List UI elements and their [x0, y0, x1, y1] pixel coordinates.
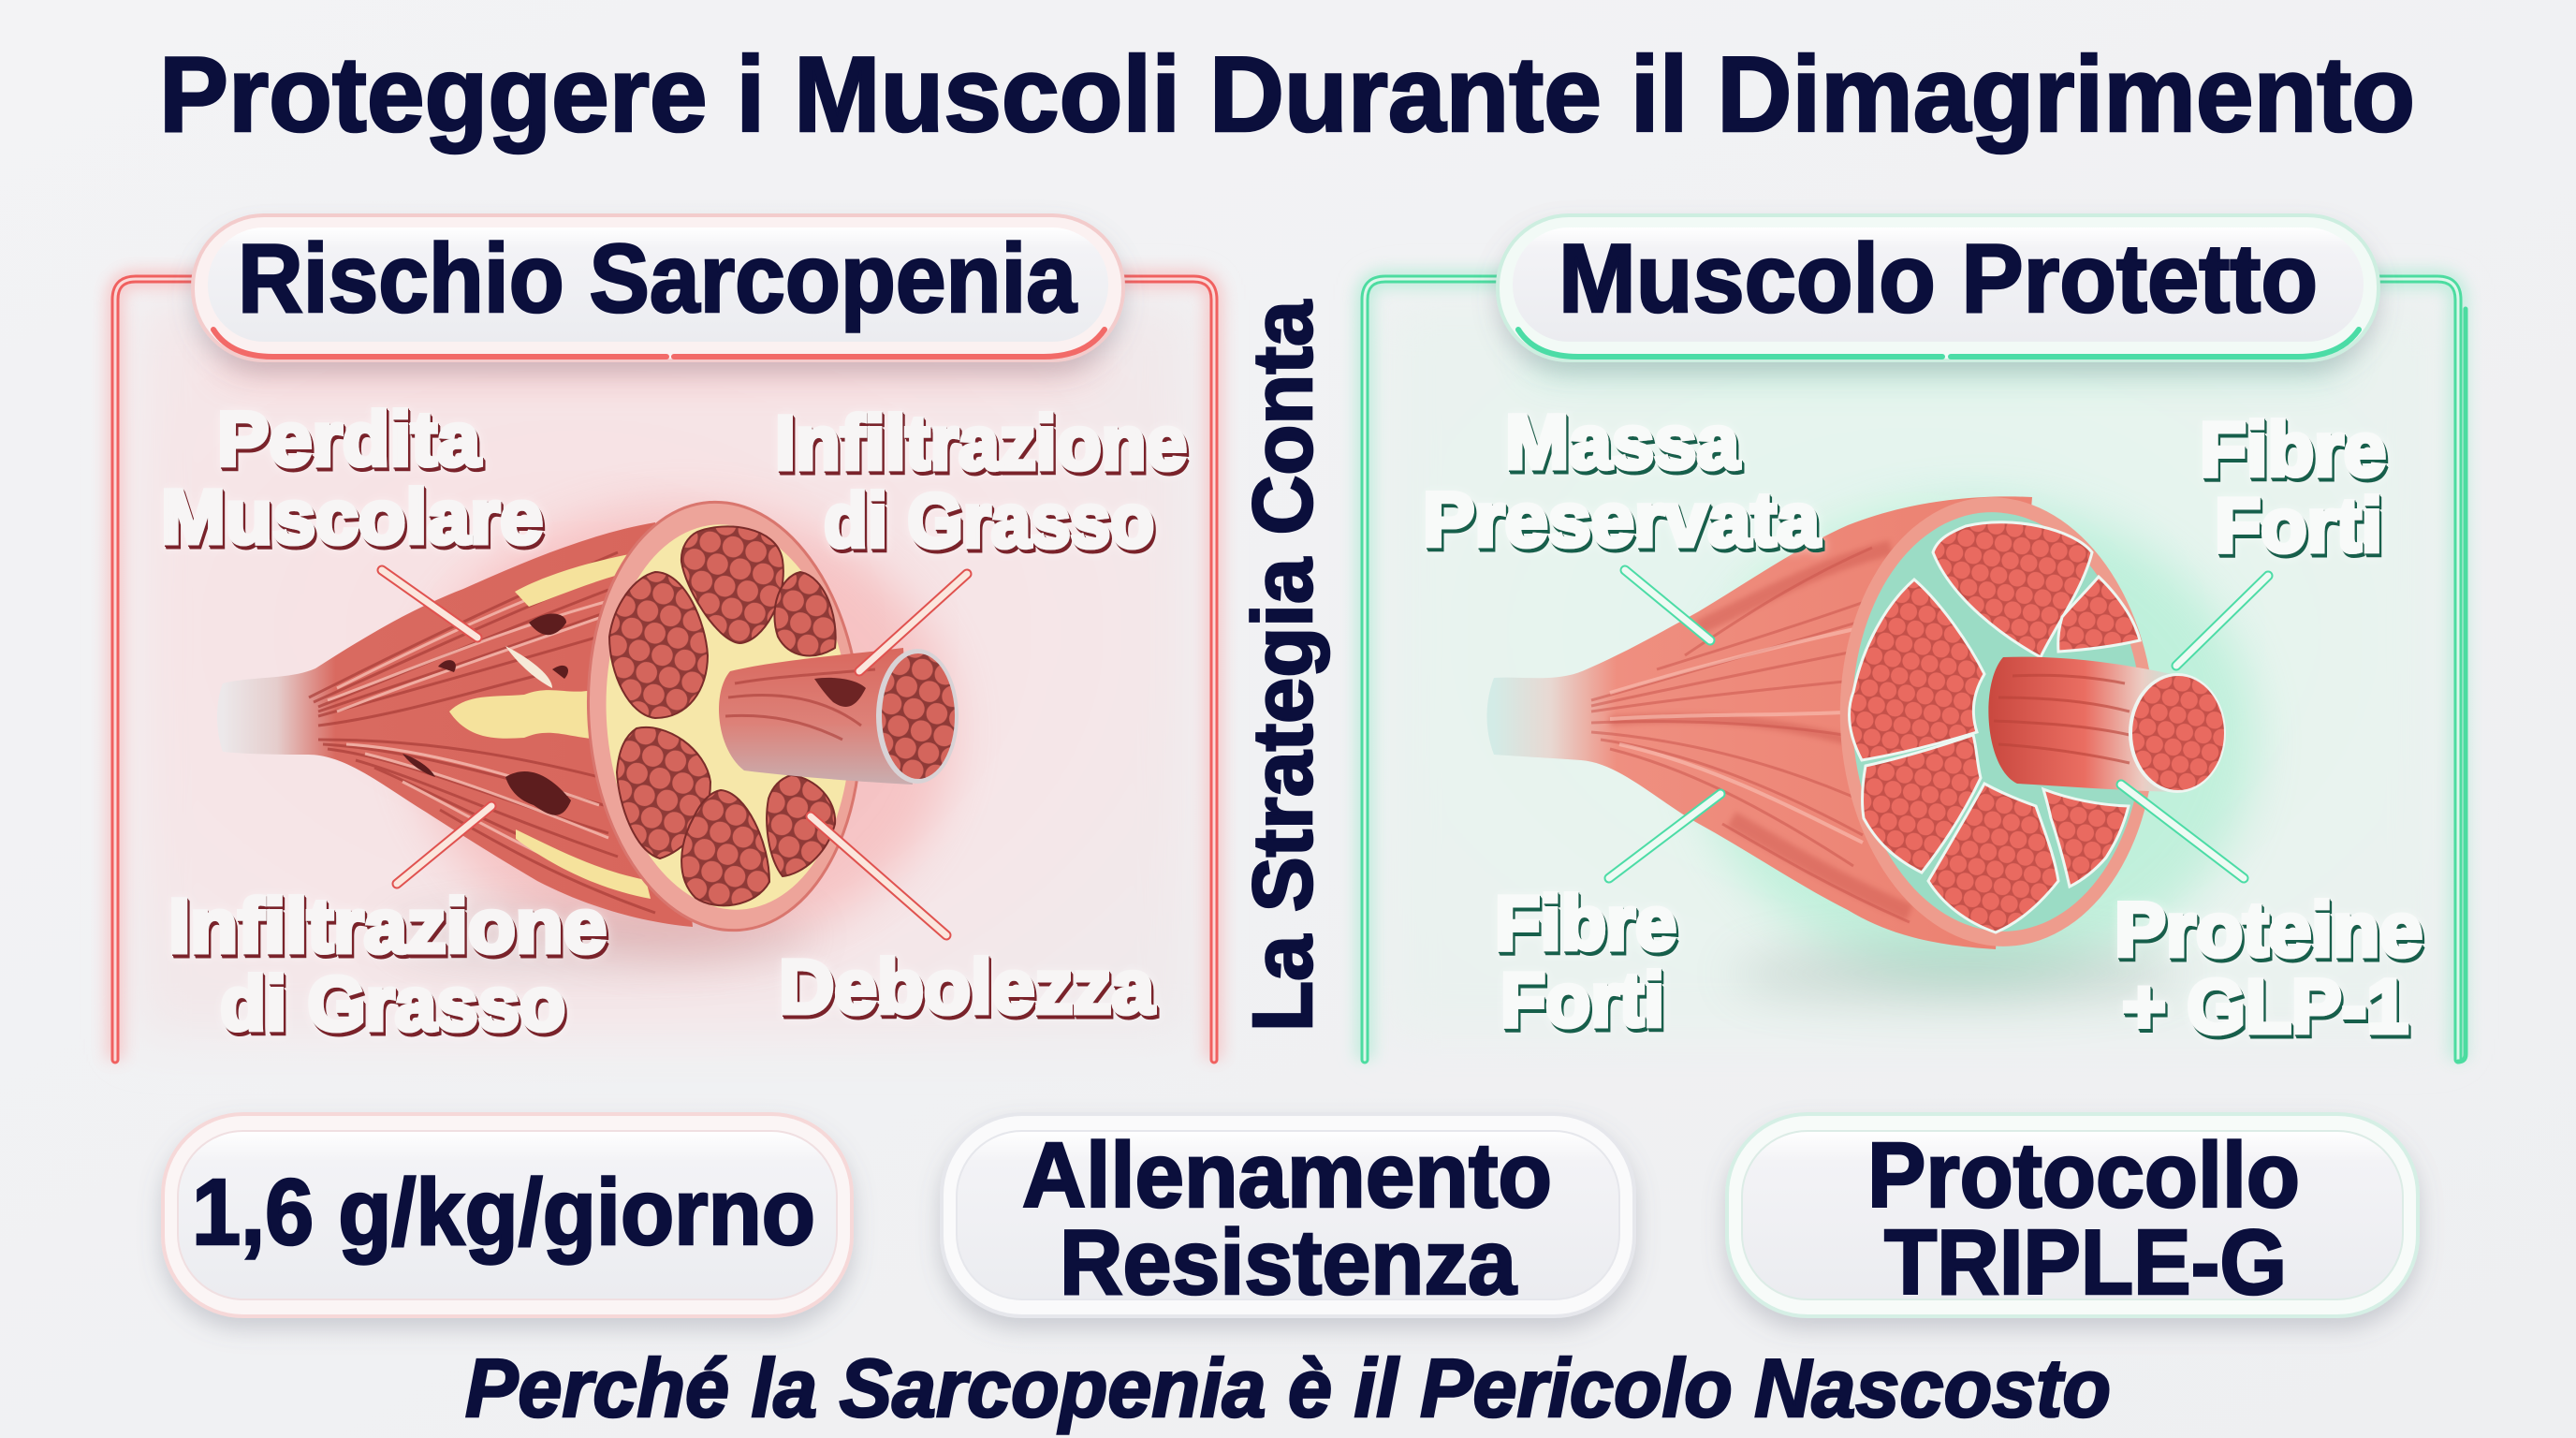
cast shadow [1732, 946, 2181, 1002]
bundle end cells [2132, 676, 2224, 790]
label: fibre forti bottom: Forti [1500, 958, 1664, 1043]
panel tint [1385, 300, 2443, 1039]
header text: Muscolo Protetto [1559, 225, 2318, 333]
muscle body [1486, 496, 2032, 949]
fat layer [593, 516, 863, 918]
frame [1365, 279, 2466, 1062]
pill text: 1,6 g/kg/giorno [192, 1160, 815, 1265]
panel tint [136, 300, 1193, 1039]
muscle glow [412, 506, 955, 955]
pill: protein target [163, 1114, 852, 1316]
fibre highlights [1610, 627, 1863, 843]
bundle end cells [882, 653, 955, 779]
callout lines [1609, 570, 2268, 878]
callout lines [382, 570, 967, 935]
fascicles [1850, 522, 2140, 932]
label: perdita muscolare [161, 397, 543, 560]
panel: rischio sarcopenia [115, 215, 1214, 1060]
muscle illustration: sarcopenia [217, 492, 959, 964]
header pill [193, 215, 1123, 369]
bundle end [876, 649, 959, 784]
label: fibre forti top: Forti [2215, 483, 2382, 568]
label: massa preservata: Massa [1505, 400, 1740, 485]
connective layer [1841, 505, 2154, 939]
fascicles [609, 526, 836, 905]
label: debolezza: Debolezza [779, 945, 1155, 1030]
frame [115, 279, 1214, 1060]
pill text: Allenamento [1022, 1123, 1552, 1226]
pill text: Resistenza [1060, 1211, 1517, 1313]
muscle body [217, 522, 693, 927]
pill text [1867, 1123, 2300, 1313]
bundle fibres [725, 669, 875, 740]
label: proteine glp-1 [2115, 888, 2422, 1049]
fibre highlights [328, 562, 637, 894]
pill: triple-g protocol [1727, 1114, 2418, 1316]
central bundle [1988, 657, 2181, 792]
label: massa preservata: Preservata [1423, 477, 1821, 563]
label: infiltrazione di grasso bottom [168, 884, 607, 1047]
muscle illustration: protected [1486, 490, 2256, 1002]
footer subtitle: Perché la Sarcopenia è il Pericolo Nascosto [465, 1342, 2111, 1434]
muscle fibres [1591, 548, 1910, 922]
label: perdita muscolare: Perdita [217, 397, 481, 482]
cross-section rim [1829, 490, 2166, 954]
pill: resistance training [942, 1114, 1634, 1316]
muscle glow [1694, 501, 2256, 978]
label: massa preservata [1423, 400, 1821, 563]
bundle fibres [1994, 675, 2130, 763]
title: Proteggere i Muscoli Durante il Dimagrimento [159, 36, 2415, 154]
cross-section rim [574, 492, 875, 940]
muscle fibres [309, 552, 655, 913]
pill text [1022, 1123, 1552, 1313]
label: proteine glp-1: Proteine [2115, 888, 2422, 973]
header text: Rischio Sarcopenia [238, 225, 1077, 333]
label: infiltrazione di grasso bottom: Infiltrazione [168, 884, 607, 969]
fat deposits [449, 550, 651, 899]
muscle tears [402, 614, 571, 815]
bundle tear [814, 678, 866, 707]
header pill [1498, 215, 2378, 369]
frame glow [115, 279, 1214, 1060]
label: fibre forti top [2200, 407, 2386, 568]
label: fibre forti top: Fibre [2200, 407, 2386, 492]
label: perdita muscolare: Muscolare [161, 475, 543, 560]
pill text: TRIPLE-G [1884, 1211, 2287, 1313]
frame glow [1365, 279, 2458, 1060]
central bundle [719, 648, 913, 785]
label: infiltrazione di grasso bottom: di Grasso [220, 961, 565, 1047]
muscle darker bands [1610, 548, 1910, 913]
panel: muscolo protetto [1365, 215, 2466, 1062]
label: infiltrazione di grasso top: di Grasso [824, 478, 1154, 564]
label: proteine glp-1: + GLP-1 [2122, 964, 2408, 1049]
bundle end [2129, 673, 2226, 793]
label: fibre forti bottom: Fibre [1495, 881, 1676, 966]
label: fibre forti bottom [1495, 881, 1676, 1043]
label: infiltrazione di grasso top: Infiltrazione [775, 401, 1187, 486]
cast shadow [384, 908, 814, 964]
pill text: Protocollo [1867, 1123, 2300, 1226]
vertical label: La Strategia Conta [1237, 300, 1330, 1032]
label: infiltrazione di grasso top [775, 401, 1187, 564]
